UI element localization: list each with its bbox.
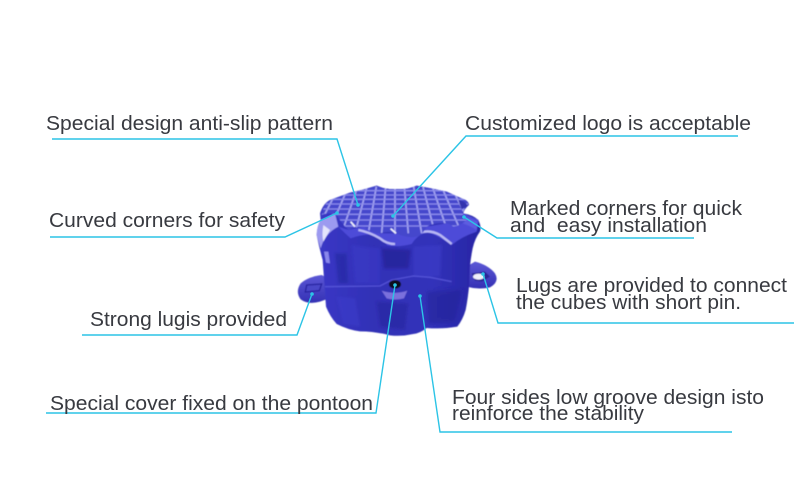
- cover recess with screw: [382, 280, 407, 299]
- label: lugs: [516, 274, 787, 314]
- label: marked corners: Marked corners for quick: [510, 197, 743, 220]
- label: low groove design: [452, 386, 764, 425]
- label: lugs: the cubes with short pin.: [516, 291, 741, 314]
- label: strong lugs: Strong lugis provided: [90, 308, 287, 331]
- cube body silhouette: [317, 186, 481, 336]
- icon: left lug: [298, 275, 342, 303]
- pontoon cube product image: [298, 186, 497, 336]
- label: low groove design: Four sides low groove design isto: [452, 386, 764, 409]
- top rim highlights: [317, 213, 479, 248]
- top anti-slip face: [321, 185, 469, 236]
- label: marked corners: [510, 197, 743, 237]
- label: special cover: Special cover fixed on the pontoon: [50, 392, 373, 415]
- label: curved corners: Curved corners for safety: [49, 209, 286, 232]
- icon: right lug: [451, 262, 497, 289]
- infographic canvas: [46, 115, 794, 433]
- label: low groove design: reinforce the stability: [452, 402, 645, 425]
- body groove shading: [324, 245, 462, 330]
- label: lugs: Lugs are provided to connect: [516, 274, 787, 297]
- label: customized logo: Customized logo is acceptable: [465, 112, 751, 135]
- leader lines: [46, 136, 794, 432]
- label: marked corners: and easy installation: [510, 214, 707, 237]
- label: anti-slip pattern: Special design anti-slip pattern: [46, 112, 333, 135]
